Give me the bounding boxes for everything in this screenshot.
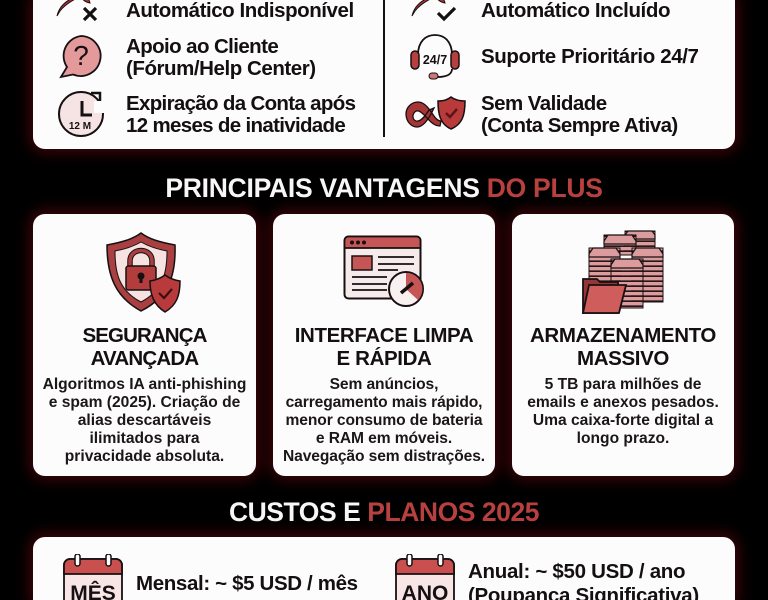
heading: principais vantagens: PRINCIPAIS VANTAGENS DO PLUS: [165, 173, 603, 203]
icon: browser with gauge: [344, 236, 424, 307]
card title: ARMAZENAMENTO: [530, 324, 716, 347]
text: priority support: Suporte Prioritário 24/7: [481, 45, 699, 68]
card title: E RÁPIDA: [336, 347, 432, 370]
panel: costs and plans: [33, 537, 735, 600]
icon: shield with lock: [106, 232, 181, 313]
icon: 24/7 headset: 24/7: [423, 53, 447, 67]
card title: [530, 324, 716, 370]
text: annual price: Anual: ~ $50 USD / ano: [468, 560, 685, 583]
icon: 24/7 headset: [410, 34, 460, 80]
card body: menor consumo de bateria: [286, 412, 482, 429]
text: account expiry: 12 meses de inatividade: [126, 114, 345, 137]
card body: [527, 376, 719, 447]
text: no expiry: (Conta Sempre Ativa): [481, 114, 678, 137]
text: annual price: [468, 560, 699, 600]
icon: monthly calendar: [63, 554, 123, 600]
card body: longo prazo.: [577, 430, 669, 447]
text: account expiry: [126, 92, 356, 137]
text: customer support: (Fórum/Help Center): [126, 57, 316, 80]
card title: [82, 324, 207, 370]
icon: question bubble: ?: [73, 40, 89, 71]
divider: [383, 0, 385, 137]
card body: carregamento mais rápido,: [286, 394, 482, 411]
card body: ilimitados para: [89, 430, 200, 447]
card body: e spam (2025). Criação de: [49, 394, 240, 411]
text: monthly price: Mensal: ~ $5 USD / mês: [136, 572, 358, 595]
icon: stacks of mail and folder: [582, 230, 664, 314]
text: no expiry: Sem Validade: [481, 92, 607, 115]
icon: automatic unavailable: [56, 0, 98, 22]
card title: SEGURANÇA: [82, 324, 207, 347]
text: customer support: [126, 35, 316, 80]
icon: annual calendar: [395, 554, 455, 600]
panel: feature comparison: [33, 0, 735, 149]
card title: [295, 324, 474, 370]
card body: Algoritmos IA anti-phishing: [43, 376, 246, 393]
text: account expiry: Expiração da Conta após: [126, 92, 355, 115]
card body: alias descartáveis: [78, 412, 211, 429]
text: customer support: Apoio ao Cliente: [126, 35, 278, 58]
card body: emails e anexos pesados.: [527, 394, 719, 411]
card title: INTERFACE LIMPA: [295, 324, 473, 347]
heading: custos e planos: CUSTOS E PLANOS 2025: [229, 497, 539, 527]
icon: 12 month expiry clock: 12 M: [69, 121, 91, 132]
panel: advanced security: [33, 214, 256, 476]
icon: infinity and shield: [405, 96, 466, 130]
card body: Uma caixa-forte digital a: [533, 412, 713, 429]
panel: massive storage: [512, 214, 734, 476]
card title: MASSIVO: [577, 347, 669, 370]
icon: 12 month expiry clock: [58, 91, 104, 137]
panel: clean interface: [273, 214, 495, 476]
card body: [283, 376, 485, 465]
card body: Sem anúncios,: [330, 376, 438, 393]
card title: AVANÇADA: [91, 347, 198, 370]
icon: question bubble: [59, 35, 102, 78]
card body: Navegação sem distrações.: [283, 448, 485, 465]
card body: 5 TB para milhões de: [545, 376, 701, 393]
card body: e RAM em móveis.: [316, 430, 452, 447]
icon: automatic included: [412, 0, 456, 22]
card body: privacidade absoluta.: [65, 448, 224, 465]
text: no expiry: [481, 92, 678, 137]
card body: [43, 376, 246, 465]
